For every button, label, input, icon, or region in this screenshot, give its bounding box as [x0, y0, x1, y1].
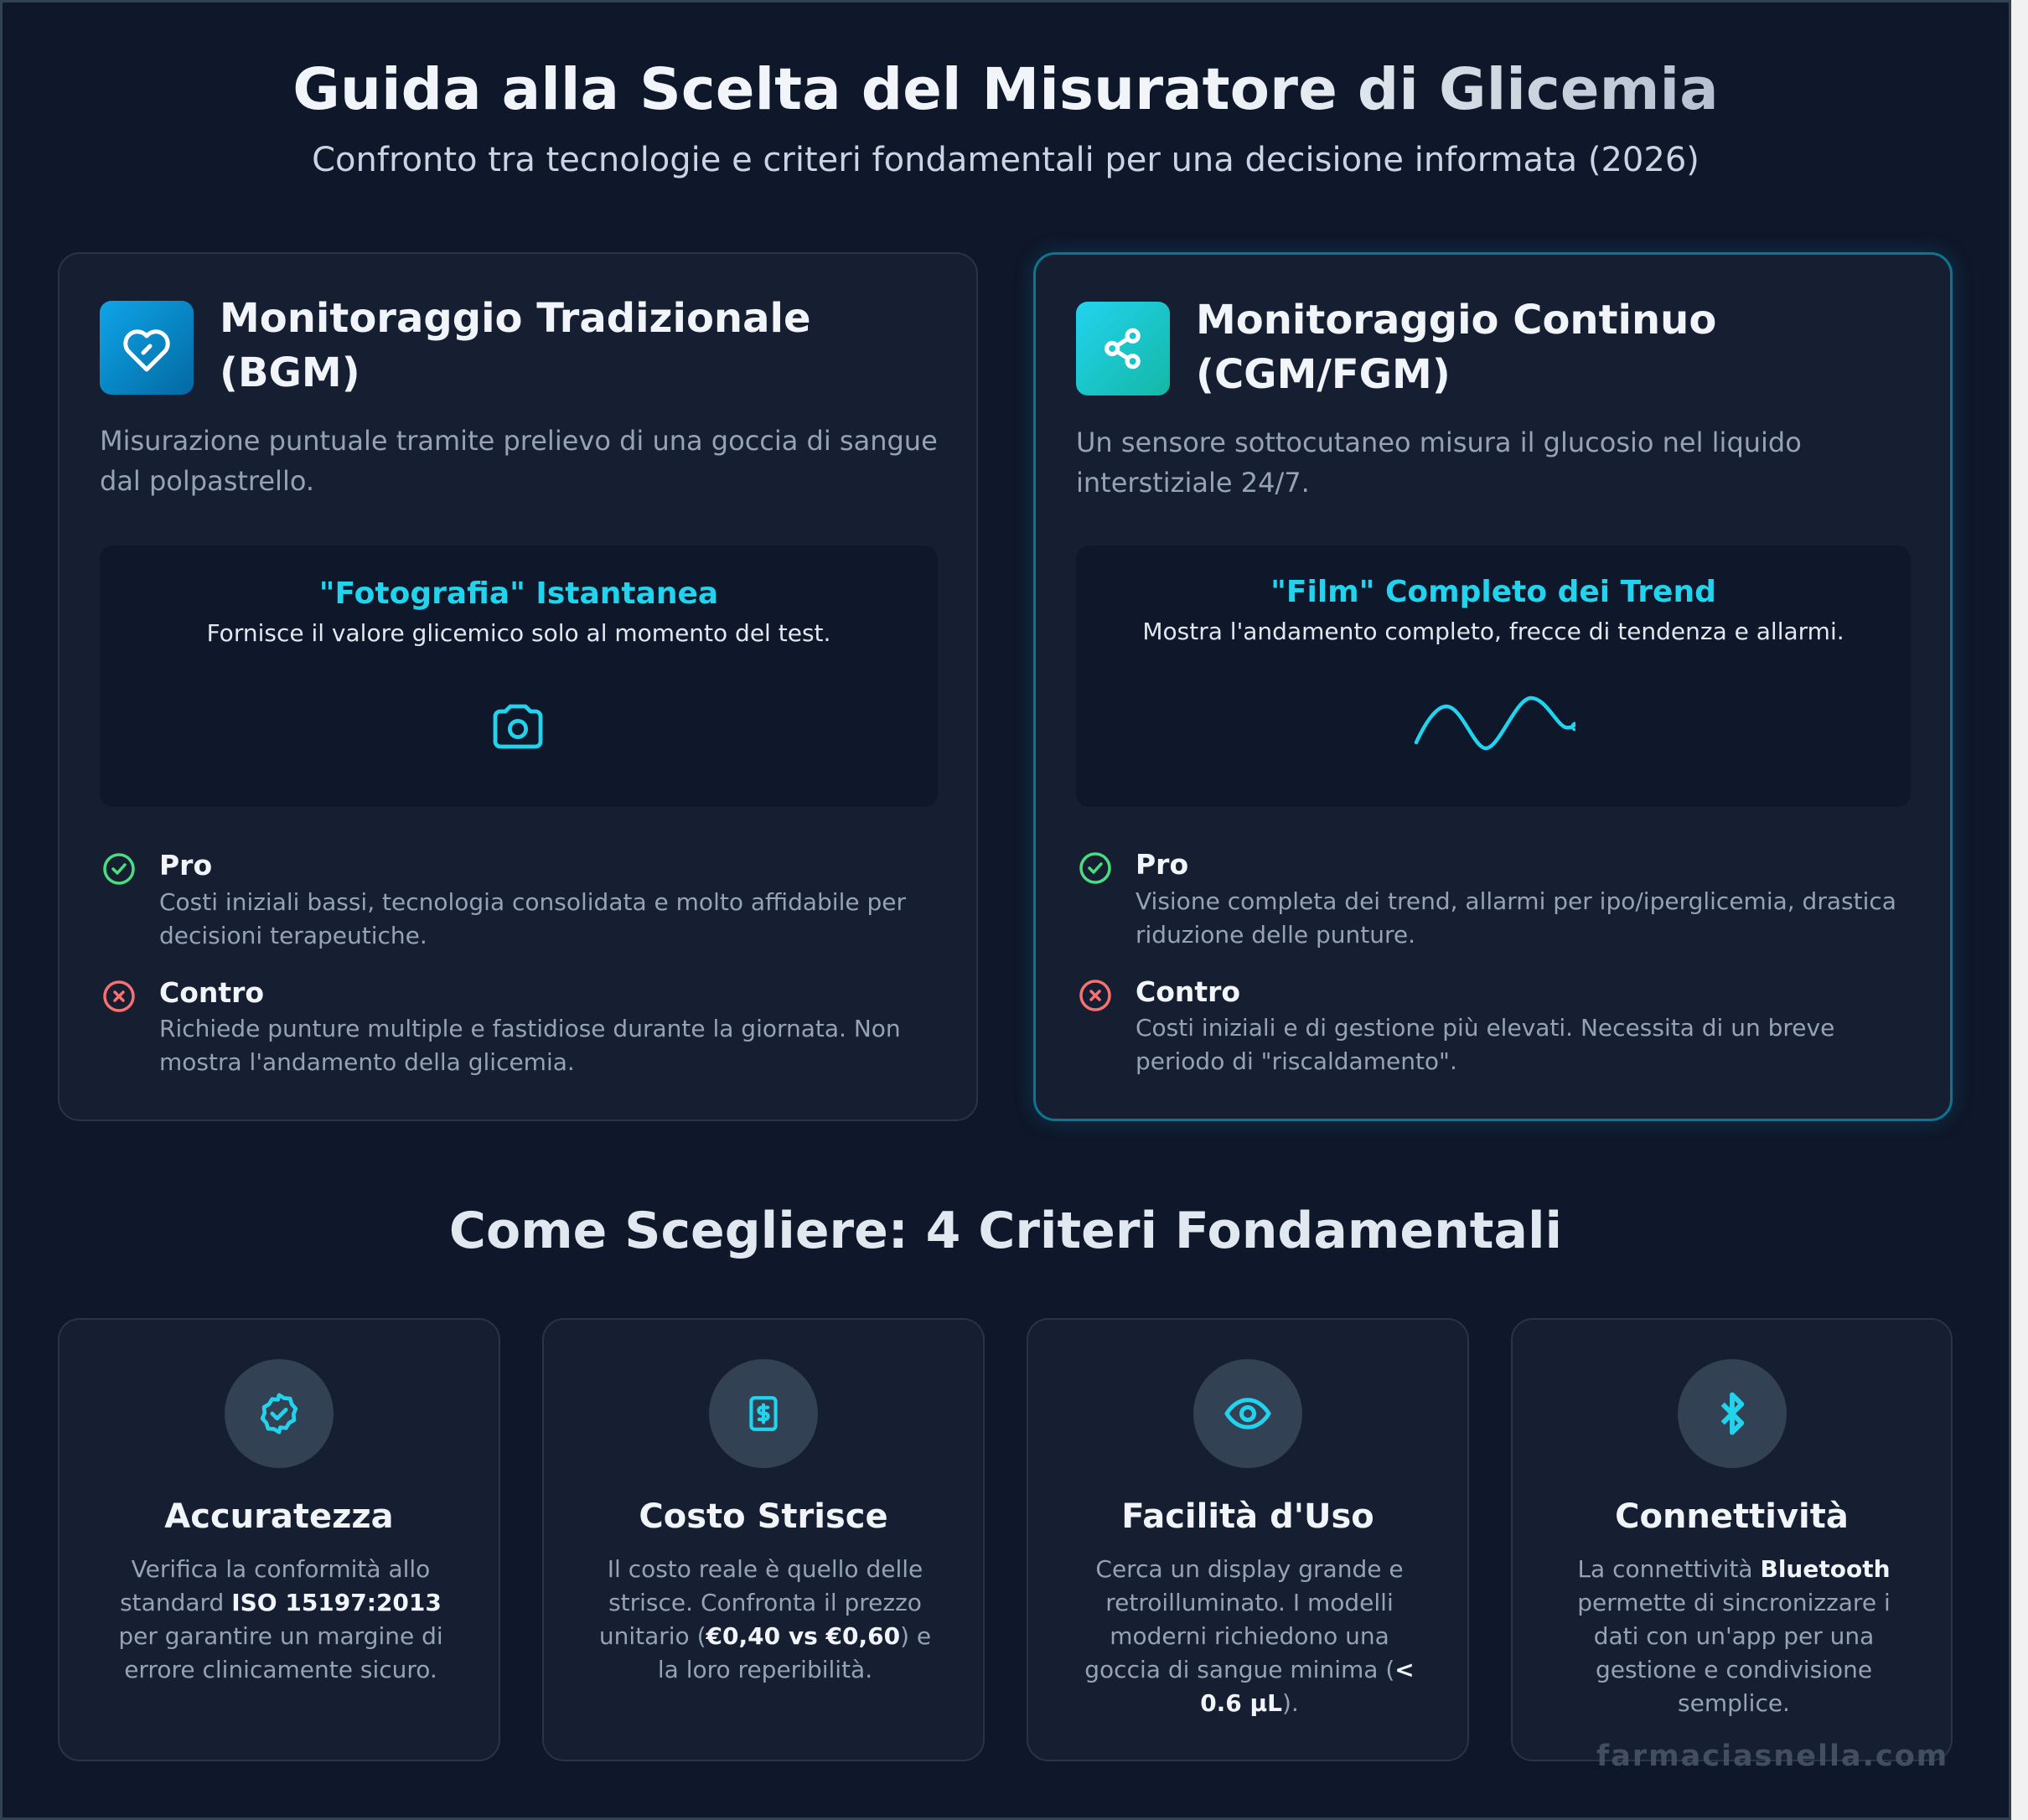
contro: Richiede punture multiple e fastidiose durante la giornata. Non mostra l'andamento della glicemia.	[159, 1015, 901, 1076]
subtitle: Confronto tra tecnologie e criteri fondamentali per una decisione informata (2026)	[312, 141, 1699, 179]
heading: (CGM/FGM)	[1196, 351, 1451, 398]
icon: camera	[493, 704, 543, 749]
text: Il costo reale è quello delle strisce. Confronta il prezzo unitario (€0,40 vs €0,60) e la loro reperibilità.	[599, 1555, 931, 1683]
icon: share	[1076, 302, 1170, 396]
icon: receipt	[709, 1359, 818, 1468]
heading	[220, 295, 811, 396]
panel: connettivita	[1511, 1318, 1953, 1761]
watermark: farmaciasnella.com	[1596, 1740, 1948, 1773]
description: Un sensore sottocutaneo misura il glucosio nel liquido interstiziale 24/7.	[1076, 427, 1802, 499]
contro	[1079, 975, 1834, 1075]
contro: Costi iniziali e di gestione più elevati. Necessita di un breve periodo di "riscaldamento".	[1136, 1014, 1834, 1075]
icon: badge check	[225, 1359, 334, 1468]
heading	[1196, 297, 1716, 398]
panel: accuratezza	[58, 1318, 500, 1761]
heading: Costo Strisce	[639, 1497, 888, 1536]
callout: fotografia	[100, 545, 938, 807]
text: La connettività Bluetooth permette di sincronizzare i dati con un'app per una gestione e condivisione semplice.	[1577, 1555, 1891, 1717]
heading: Connettività	[1615, 1497, 1849, 1536]
panel: BGM	[58, 252, 978, 1121]
contro: Contro	[159, 976, 264, 1009]
callout: film: "Film" Completo dei Trend	[1270, 575, 1716, 609]
pro: Costi iniziali bassi, tecnologia consolidata e molto affidabile per decisioni terapeutiche.	[159, 888, 906, 949]
callout: film: Mostra l'andamento completo, frecce di tendenza e allarmi.	[1142, 618, 1844, 645]
icon: bluetooth	[1678, 1359, 1787, 1468]
contro	[103, 976, 901, 1076]
heading: Monitoraggio Continuo	[1196, 297, 1716, 344]
callout: film	[1076, 545, 1911, 807]
text: Verifica la conformità allo standard ISO 15197:2013 per garantire un margine di errore clinicamente sicuro.	[118, 1555, 443, 1683]
callout: fotografia: Fornisce il valore glicemico solo al momento del test.	[207, 619, 830, 647]
pro: Visione completa dei trend, allarmi per ipo/iperglicemia, drastica riduzione delle punture.	[1136, 887, 1896, 949]
pro	[1079, 848, 1896, 949]
title	[0, 52, 2011, 127]
callout: fotografia: "Fotografia" Istantanea	[319, 577, 718, 611]
pro: Pro	[1136, 848, 1188, 881]
text: Cerca un display grande e retroilluminato. I modelli moderni richiedono una goccia di sangue minima (< 0.6 µL).	[1084, 1555, 1415, 1717]
description: Misurazione puntuale tramite prelievo di una goccia di sangue dal polpastrello.	[100, 425, 938, 497]
heading: Monitoraggio Tradizionale	[220, 295, 811, 342]
panel: facilita	[1027, 1318, 1469, 1761]
icon: eye	[1193, 1359, 1302, 1468]
section heading: Come Scegliere: 4 Criteri Fondamentali	[449, 1202, 1562, 1260]
title: Guida alla Scelta del Misuratore di Glicemia	[292, 56, 1719, 123]
panel: costo	[542, 1318, 985, 1761]
icon: heart	[100, 301, 194, 395]
pro	[103, 849, 906, 949]
pro: Pro	[159, 849, 212, 882]
heading: Accuratezza	[164, 1497, 394, 1536]
contro: Contro	[1136, 975, 1240, 1008]
heading: (BGM)	[220, 349, 360, 396]
icon: wave	[1415, 695, 1575, 751]
heading: Facilità d'Uso	[1121, 1497, 1374, 1536]
panel: CGM	[1033, 252, 1953, 1121]
